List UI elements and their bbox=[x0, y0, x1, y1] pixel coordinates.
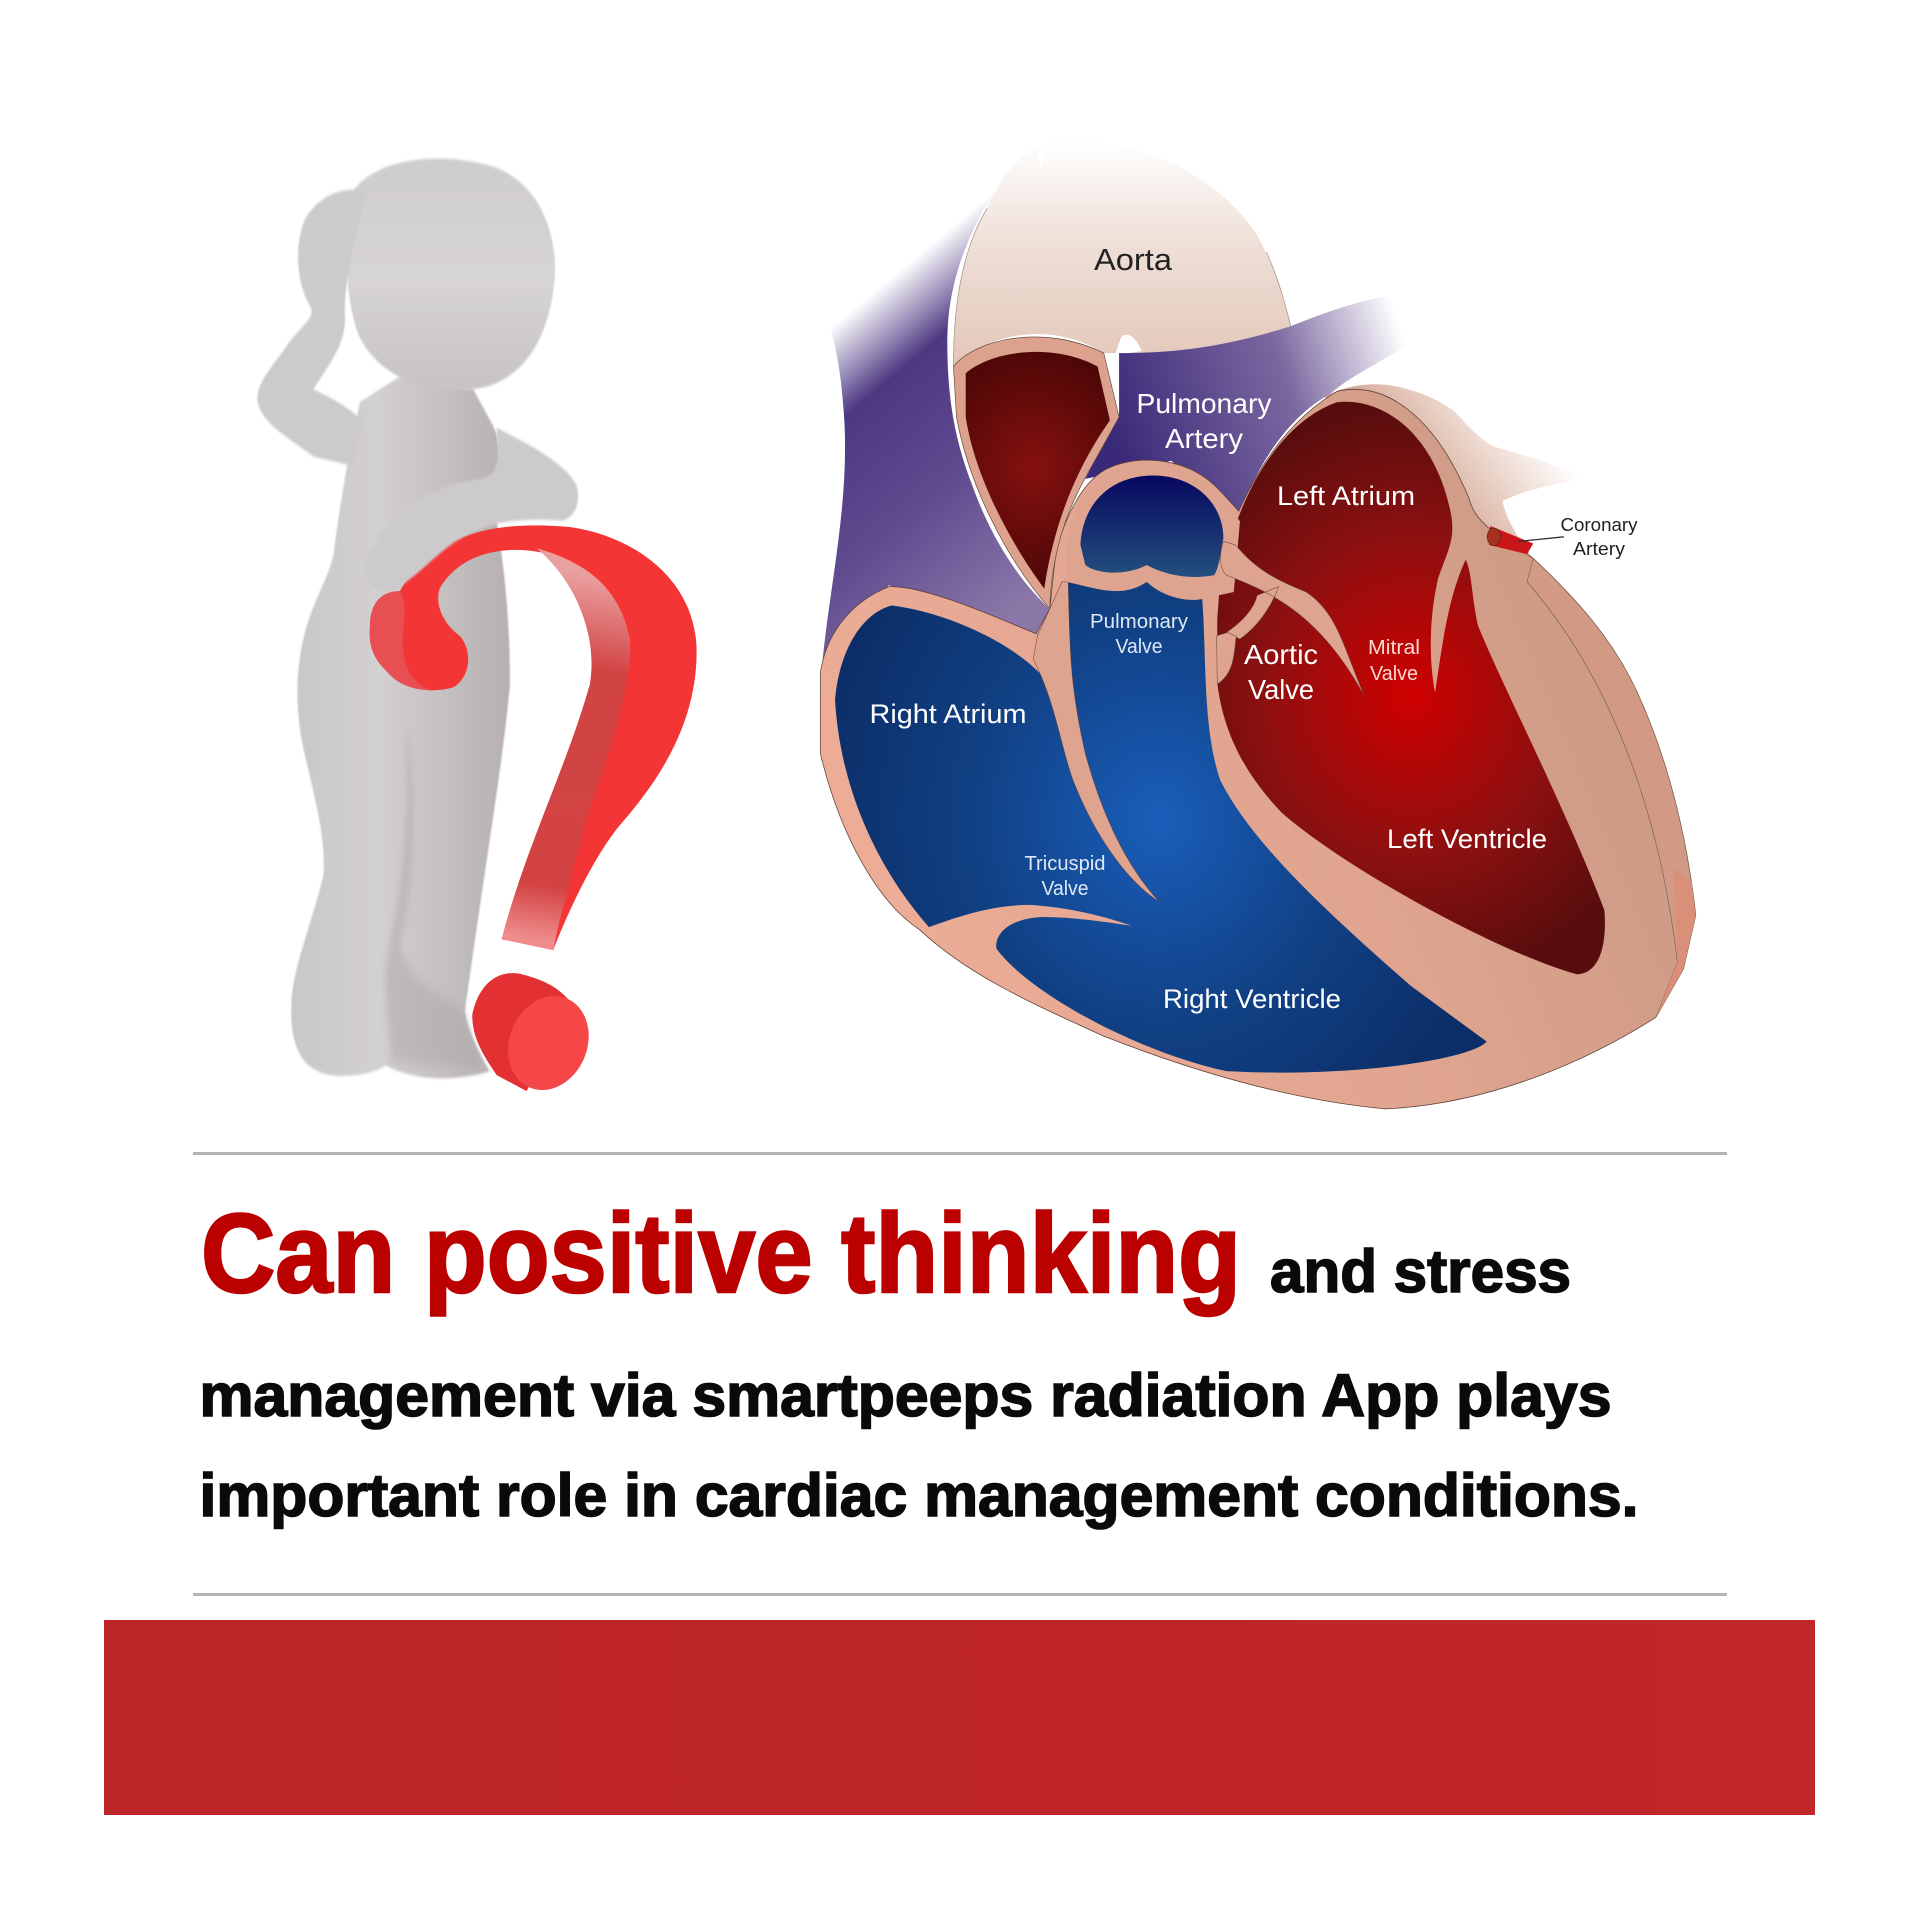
label: Tricuspid Valve: Valve bbox=[1042, 878, 1088, 900]
label: Aorta: Aorta bbox=[1094, 242, 1173, 277]
pulmonary valve ring bbox=[1066, 462, 1240, 600]
label: Left Atrium: Left Atrium bbox=[1277, 481, 1415, 511]
label: Pulmonary Valve: Pulmonary bbox=[1090, 611, 1188, 633]
dark red aortic chamber bbox=[966, 352, 1110, 589]
label: Aortic Valve: Aortic bbox=[1244, 639, 1318, 670]
label: Mitral Valve: Mitral bbox=[1368, 637, 1420, 659]
label: Aortic Valve bbox=[1244, 639, 1318, 705]
label: Right Ventricle: Right Ventricle bbox=[1163, 984, 1341, 1014]
aorta bbox=[953, 141, 1291, 367]
label: Aortic Valve: Valve bbox=[1248, 674, 1314, 705]
label: Mitral Valve bbox=[1368, 637, 1420, 685]
coronary artery vessel bbox=[1487, 526, 1564, 554]
illustration: thinking grey figure leaning on red question mark bbox=[257, 159, 697, 1100]
hip and leg shading bbox=[386, 739, 483, 1069]
outer right wall rim bbox=[1527, 558, 1696, 1017]
right heart blood blue bbox=[835, 579, 1487, 1073]
heart labels bbox=[870, 242, 1638, 1014]
heart body wall bbox=[820, 389, 1696, 1109]
illustration: heart cross-section bbox=[820, 131, 1696, 1109]
left heart blood red bbox=[1217, 402, 1605, 974]
headline red phrase: Can positive thinking bbox=[201, 1191, 1241, 1316]
figure head bbox=[346, 159, 555, 390]
pulmonary valve pocket bbox=[1080, 476, 1223, 577]
figure raised arm with hand on head bbox=[257, 190, 367, 466]
label: Coronary Artery: Coronary bbox=[1560, 515, 1638, 535]
red banner bbox=[104, 1620, 1815, 1815]
headline line 2: management via smartpeeps radiation App plays bbox=[200, 1362, 1612, 1429]
label: Tricuspid Valve: Tricuspid bbox=[1024, 853, 1106, 875]
label: Pulmonary Artery bbox=[1136, 388, 1272, 454]
septum and tricuspid leaflet bbox=[1033, 582, 1159, 902]
red question mark dot bbox=[472, 973, 592, 1100]
headline line 3: important role in cardiac management conditions. bbox=[200, 1462, 1638, 1529]
mitral left leaflet bbox=[1220, 542, 1364, 696]
label: Pulmonary Artery: Artery bbox=[1165, 423, 1243, 454]
label: Pulmonary Valve: Valve bbox=[1116, 636, 1162, 658]
label: Left Ventricle: Left Ventricle bbox=[1387, 824, 1547, 854]
headline line 1 end: and stress bbox=[1270, 1238, 1571, 1305]
dark red aortic chamber wall bbox=[953, 337, 1119, 609]
vena cava purple fading upward bbox=[822, 131, 1067, 673]
label: Pulmonary Artery: Pulmonary bbox=[1136, 388, 1272, 419]
pulmonary artery bbox=[1085, 295, 1410, 518]
aorta white notches bbox=[1037, 150, 1142, 355]
upper right wall fading bbox=[1325, 384, 1588, 565]
headline text bbox=[200, 1191, 1638, 1529]
red question mark bbox=[370, 525, 697, 950]
label: Right Atrium: Right Atrium bbox=[870, 699, 1026, 729]
label: Mitral Valve: Valve bbox=[1370, 663, 1418, 685]
figure body bbox=[291, 376, 510, 1078]
label: Tricuspid Valve bbox=[1024, 853, 1106, 900]
figure leaning arm bbox=[365, 428, 578, 591]
label: Coronary Artery bbox=[1560, 515, 1638, 559]
aortic valve cusp bbox=[1217, 632, 1236, 684]
label: Coronary Artery: Artery bbox=[1573, 539, 1625, 559]
label: Pulmonary Valve bbox=[1090, 611, 1188, 658]
